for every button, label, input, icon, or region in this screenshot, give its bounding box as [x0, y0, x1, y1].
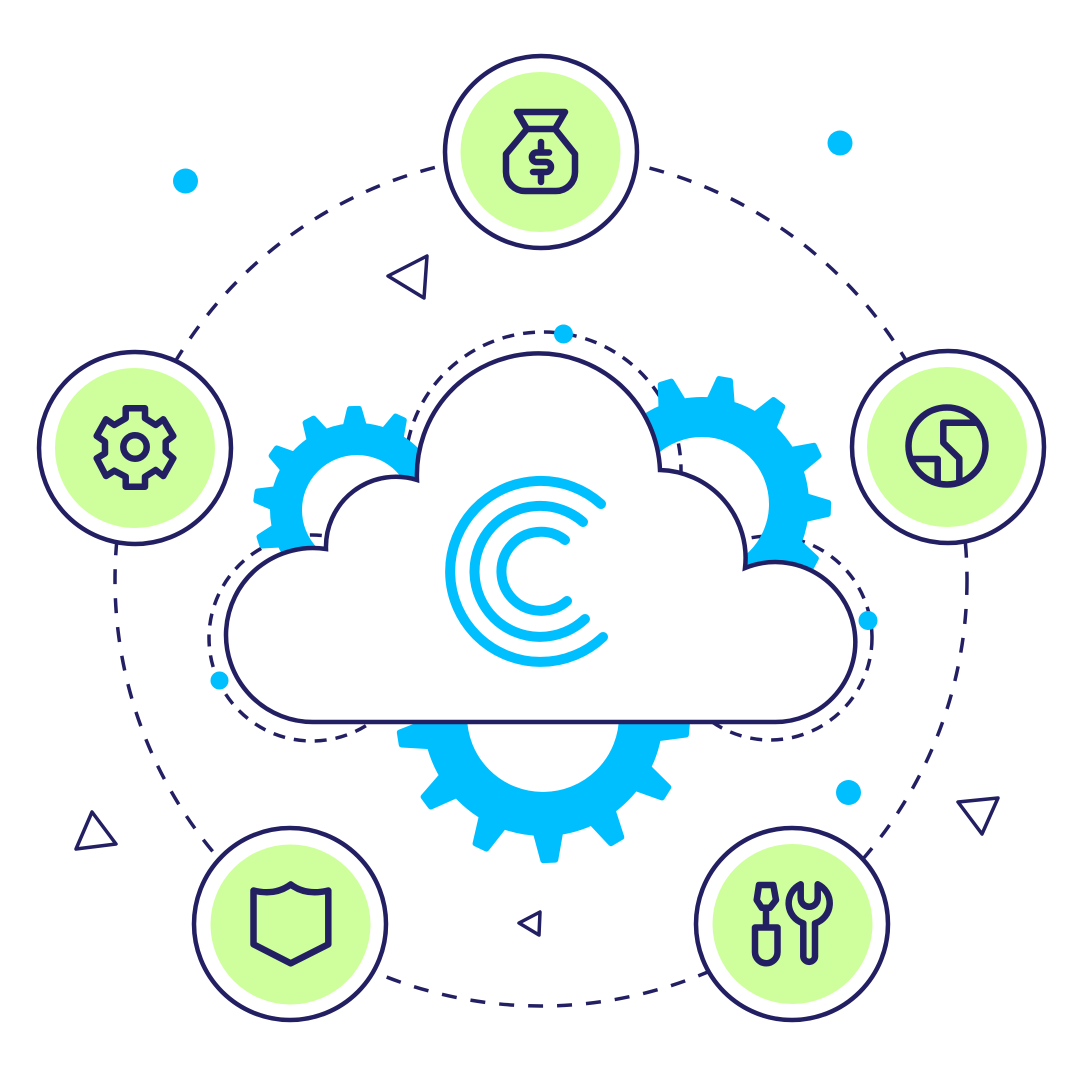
- decorative triangles: [76, 256, 998, 935]
- node: security: [194, 828, 386, 1020]
- node: globe: [852, 351, 1044, 543]
- blue gear left: [256, 409, 442, 588]
- icon: money bag: [506, 112, 575, 191]
- icon: screwdriver and wrench: [755, 884, 830, 963]
- node: settings: [39, 352, 231, 544]
- icon: settings gear: [97, 408, 173, 487]
- blue gear right: [608, 378, 828, 614]
- node: tools: [696, 828, 888, 1020]
- concentric C logo: [450, 481, 603, 662]
- outer dashed orbit ring: [115, 154, 967, 1006]
- icon: globe: [908, 408, 986, 484]
- icon: shield: [254, 884, 328, 963]
- node: money: [445, 56, 637, 248]
- central cloud: [226, 353, 855, 722]
- decorative blue dots: [173, 130, 878, 805]
- blue gear bottom: [399, 618, 687, 860]
- dashed offset cloud outline: [209, 332, 872, 741]
